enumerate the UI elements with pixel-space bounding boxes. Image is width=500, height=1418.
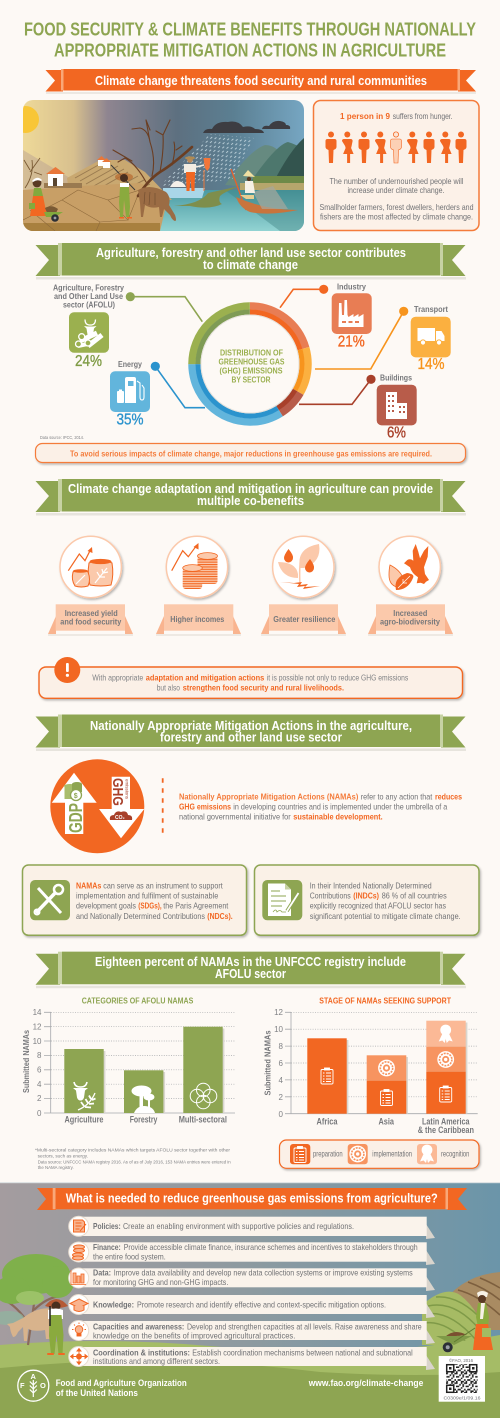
text: undernourished: The number of undernourished people will xyxy=(330,176,464,186)
footnote: sectors, such as energy. xyxy=(38,1154,88,1158)
icon: GDP up and GHG down: emissions xyxy=(124,779,130,800)
icon row: nine people xyxy=(326,132,466,163)
text: instrument: development goals xyxy=(76,900,136,910)
row: finance xyxy=(69,1242,435,1265)
row: data: Data: xyxy=(93,1268,111,1278)
text: INDCs: explicitly recognized that AFOLU sector has xyxy=(310,900,446,910)
sector: AFOLU 24% xyxy=(53,282,124,370)
connectors xyxy=(126,285,408,408)
farmer woman with wheelbarrow xyxy=(29,178,63,222)
row: finance: Finance: xyxy=(93,1242,121,1252)
text: instrument: the Paris Agreement xyxy=(163,900,229,910)
man in flood xyxy=(170,156,210,191)
bar chart: categories of AFOLU NAMAs xyxy=(21,995,235,1124)
sector: AFOLU 24%: 24% xyxy=(75,353,102,370)
row: policies: Create an enabling environment with supportive policies and regulations. xyxy=(123,1221,354,1231)
icon: cow head and wheat xyxy=(73,1082,96,1110)
FAO name: Food and Agriculture Organization xyxy=(56,1378,187,1388)
icon: buildings xyxy=(386,392,407,419)
ribbon heading: NAMAs: forestry and other land use sector xyxy=(160,730,342,744)
data source note: Data source: IPCC, 2014. xyxy=(40,435,84,440)
rain xyxy=(160,134,254,186)
text: INDCs: 86 % of all countries xyxy=(382,890,447,900)
bar chart: categories of AFOLU NAMAs: Agriculture xyxy=(64,1114,104,1124)
sector: AFOLU 24%: and Other Land Use xyxy=(54,291,123,301)
back hill xyxy=(67,160,172,200)
callout: major reductions required xyxy=(36,444,466,462)
bar chart: categories of AFOLU NAMAs: 2 xyxy=(37,1094,42,1103)
row: capacities and awareness: Capacities and awareness: xyxy=(93,1321,184,1331)
ribbon heading: co-benefits xyxy=(36,479,466,516)
bar chart: stage of NAMAs seeking support: Asia xyxy=(378,1116,395,1126)
sector: transport 14%: Transport xyxy=(414,304,448,314)
footer landscape xyxy=(0,1182,500,1418)
callout: adaptation and mitigation actions: it is possible not only to reduce GHG emissions xyxy=(267,673,408,683)
bar: Asia xyxy=(367,1055,408,1114)
row: capacities and awareness: Develop and strengthen capacities at all levels. Raise awareness and share xyxy=(187,1321,422,1331)
callout: major reductions required: To avoid serious impacts of climate change, major reductions in greenhouse gas emissions are required. xyxy=(70,449,432,459)
text: undernourished xyxy=(320,176,474,222)
bar chart: stage of NAMAs seeking support: STAGE OF NAMAs SEEKING SUPPORT xyxy=(319,995,452,1005)
QR code xyxy=(439,1356,485,1402)
icon: GDP up and GHG down xyxy=(50,759,144,853)
bar chart: stage of NAMAs seeking support: 10 xyxy=(274,1025,284,1034)
sector: transport 14% xyxy=(411,304,451,373)
sector: buildings 6%: Buildings xyxy=(380,372,412,382)
text: instrument: and Nationally Determined Contributions xyxy=(76,911,205,921)
ribbon heading: NAMAs: Nationally Appropriate Mitigation Actions in the agriculture, xyxy=(90,719,412,733)
bar chart: categories of AFOLU NAMAs: 10 xyxy=(33,1037,42,1046)
sector: energy 35%: Energy xyxy=(118,359,142,369)
text: INDCs: Contributions xyxy=(310,890,351,900)
small dead tree xyxy=(24,158,42,188)
legend item: implementation: implementation xyxy=(372,1148,412,1158)
text: instrument: implementation and fulfilment of sustainable xyxy=(76,890,219,900)
panel: NAMAs as instrument xyxy=(22,865,246,935)
row: coordination and institutions: institutions and among different sectors. xyxy=(93,1356,220,1366)
sector: energy 35%: 35% xyxy=(116,411,144,428)
text: NAMA definition xyxy=(179,791,462,821)
icon: interlocking circles xyxy=(190,1083,217,1109)
ribbon heading: eighteen percent: AFOLU sector xyxy=(215,967,286,981)
text: INDCs: (INDCs) xyxy=(353,890,379,900)
farmer with hoe xyxy=(111,165,135,218)
icon: GDP up and GHG down: CO₂ xyxy=(115,815,125,821)
text: undernourished: Smallholder farmers, forest dwellers, herders and xyxy=(320,202,474,212)
text: INDCs xyxy=(310,880,461,921)
donut centre label: GREENHOUSE GAS xyxy=(218,356,285,366)
row: data: for monitoring GHG and non-GHG impacts. xyxy=(93,1277,228,1287)
row: data xyxy=(69,1268,435,1291)
callout: adaptation and mitigation actions: With appropriate xyxy=(92,673,144,683)
sector: AFOLU 24%: sector (AFOLU) xyxy=(63,300,115,310)
legend item: implementation xyxy=(348,1144,412,1164)
row: knowledge: Knowledge: xyxy=(93,1299,134,1309)
icon: GDP up and GHG down: $ xyxy=(74,793,78,800)
row: capacities and awareness: knowledge on the benefits of improved agricultural practices. xyxy=(93,1331,295,1341)
icon: network arrows xyxy=(70,1348,88,1364)
icon: GDP up and GHG down: GDP xyxy=(66,803,86,833)
cow xyxy=(138,187,176,221)
bar: forestry xyxy=(124,1070,165,1113)
ribbon heading: climate change threatens food security: Climate change threatens food security and rural communities xyxy=(95,74,427,88)
benefit: increased yield xyxy=(48,536,133,636)
donut centre label: (GHG) EMISSIONS xyxy=(220,366,283,376)
bar chart: categories of AFOLU NAMAs: Multi-sectoral xyxy=(179,1114,227,1124)
bar chart: categories of AFOLU NAMAs: 8 xyxy=(37,1051,42,1060)
farmer with wheelbarrow xyxy=(436,1291,493,1352)
callout: adaptation and mitigation actions xyxy=(39,657,462,698)
icon: sun xyxy=(23,106,39,133)
ribbon heading: eighteen percent xyxy=(36,952,466,988)
FAO logo: F xyxy=(20,1381,25,1390)
label ribbon: Increased yield xyxy=(65,608,118,618)
footnote: *Multi-sectoral category includes NAMAs which targets AFOLU sector together with other xyxy=(35,1148,231,1152)
sector: AFOLU 24%: Agriculture, Forestry xyxy=(53,282,124,292)
fisher on boat xyxy=(231,169,298,214)
bar chart: stage of NAMAs seeking support: Africa xyxy=(316,1116,338,1126)
FAO logo: O xyxy=(40,1381,46,1390)
icon: graduation cap xyxy=(70,1299,88,1312)
text: NAMA definition: in developing countries and is implemented under the umbrella of a xyxy=(233,801,448,811)
callout: adaptation and mitigation actions: but also xyxy=(157,683,180,693)
dead tree xyxy=(113,120,192,196)
bar chart: stage of NAMAs seeking support: 0 xyxy=(279,1110,284,1119)
bar: Africa xyxy=(307,1038,348,1114)
sector: energy 35% xyxy=(110,359,150,428)
icon: sacks and rising arrow xyxy=(68,547,113,587)
QR code: C0309e/1/09.16 xyxy=(444,1396,481,1400)
label ribbon xyxy=(48,604,133,636)
row: finance: the entire food system. xyxy=(93,1251,166,1261)
icon: cow and logs xyxy=(76,320,102,347)
icon: signed document xyxy=(268,884,299,916)
clouds xyxy=(203,121,290,133)
legend xyxy=(280,1140,479,1168)
legend item: recognition: recognition xyxy=(441,1148,469,1158)
sector: buildings 6% xyxy=(377,372,417,442)
text: instrument: (NDCs). xyxy=(207,911,233,921)
ribbon heading: what is needed xyxy=(37,1188,467,1210)
sector: industry 21% xyxy=(332,282,372,350)
FAO name xyxy=(56,1378,187,1398)
callout: adaptation and mitigation actions: strengthen food security and rural livelihoods. xyxy=(183,683,344,693)
icon: truck xyxy=(418,328,444,345)
bar chart: stage of NAMAs seeking support: Latin America xyxy=(422,1116,470,1126)
row: knowledge: Promote research and identify effective and context-specific mitigation options. xyxy=(137,1299,386,1309)
bar chart: stage of NAMAs seeking support: 2 xyxy=(279,1093,284,1102)
bar chart: stage of NAMAs seeking support: 12 xyxy=(274,1008,284,1017)
icon: policy document xyxy=(74,1220,86,1232)
ground xyxy=(23,183,165,231)
legend item: recognition xyxy=(417,1144,469,1164)
icon: factory xyxy=(338,300,364,327)
text: instrument: NAMAs xyxy=(76,880,102,890)
text: INDCs: significant potential to mitigate climate change. xyxy=(310,911,461,921)
QR code: ©FAO, 2016 xyxy=(449,1358,474,1363)
bar chart: stage of NAMAs seeking support: 6 xyxy=(279,1059,284,1068)
illustration: drought and flood scene xyxy=(12,100,304,231)
ribbon heading: AFOLU contributes: Agriculture, forestry and other land use sector contributes xyxy=(96,246,406,260)
text: NAMA definition: sustainable development. xyxy=(293,811,383,821)
mountains xyxy=(225,138,304,191)
panel: hunger statistics xyxy=(314,100,479,230)
FAO name: of the United Nations xyxy=(56,1388,138,1398)
dashed divider xyxy=(162,778,164,835)
website: www.fao.org/climate-change xyxy=(308,1378,423,1389)
text: INDCs: In their Intended Nationally Determined xyxy=(310,880,432,890)
icon: fuel pump and battery xyxy=(117,377,144,403)
row: capacities and awareness xyxy=(69,1320,435,1344)
ribbon heading: climate change threatens food security xyxy=(46,69,476,94)
label ribbon: Higher incomes xyxy=(170,614,225,624)
bar chart: stage of NAMAs seeking support: 4 xyxy=(279,1076,284,1085)
icon: coins xyxy=(72,1245,84,1260)
bar chart: categories of AFOLU NAMAs: Forestry xyxy=(130,1114,157,1124)
bar chart: stage of NAMAs seeking support: Submitted NAMAs xyxy=(262,1030,272,1096)
sector: industry 21%: 21% xyxy=(338,333,365,350)
icon: plant and water drops xyxy=(278,544,320,589)
cow xyxy=(7,1308,53,1341)
icon: trees xyxy=(132,1086,155,1113)
footnote: Data source: UNFCCC NAMA registry 2016. As of as of July 2016, 153 NAMA entries were entered in xyxy=(38,1160,231,1164)
row: data: Improve data availability and develop new data collection systems or improve existing systems xyxy=(114,1268,413,1278)
row: coordination and institutions: Coordination & institutions: xyxy=(93,1347,190,1357)
ground xyxy=(0,1335,500,1418)
footnote xyxy=(35,1148,231,1170)
icon: light bulb xyxy=(72,1322,86,1336)
bar chart: categories of AFOLU NAMAs: Submitted NAMAs xyxy=(21,1030,31,1093)
text: instrument xyxy=(76,880,233,921)
text: one person in nine: 1 person in 9 xyxy=(340,111,390,121)
benefit: higher incomes xyxy=(156,536,241,636)
sector: buildings 6%: 6% xyxy=(387,425,406,442)
text: NAMA definition: GHG emissions xyxy=(179,801,231,811)
row: policies xyxy=(69,1216,435,1239)
farmer xyxy=(45,1299,68,1355)
text: one person in nine: suffers from hunger. xyxy=(393,111,453,121)
text: instrument: (SDGs), xyxy=(138,900,162,910)
bar chart: categories of AFOLU NAMAs: 12 xyxy=(33,1022,42,1032)
panel: INDCs xyxy=(254,865,479,935)
bar: agriculture xyxy=(64,1049,105,1113)
bar chart: categories of AFOLU NAMAs: 0 xyxy=(37,1109,42,1118)
bar chart: stage of NAMAs seeking support: 8 xyxy=(279,1042,284,1051)
row: coordination and institutions: Establish coordination mechanisms between national and subnational xyxy=(192,1347,413,1357)
water xyxy=(160,190,304,231)
bar chart: categories of AFOLU NAMAs: 4 xyxy=(37,1080,42,1089)
text: NAMA definition: refer to any action that xyxy=(361,791,433,801)
donut chart: GHG emissions by sector xyxy=(192,306,308,422)
label ribbon: Increased xyxy=(393,608,427,618)
footnote: the NAMA registry. xyxy=(38,1165,74,1170)
label ribbon: agro-biodiversity xyxy=(380,616,440,626)
tree xyxy=(0,1254,74,1345)
bar: Latin America and the Caribbean xyxy=(426,1021,467,1114)
label ribbon: and food security xyxy=(60,616,122,626)
benefit: agro-biodiversity xyxy=(368,536,453,636)
icon: bar graph xyxy=(71,1270,86,1284)
icon: exclamation xyxy=(54,657,80,683)
ribbon heading: eighteen percent: Eighteen percent of NAMAs in the UNFCCC registry include xyxy=(95,955,406,969)
ribbon heading: co-benefits: Climate change adaptation and mitigation in agriculture can provide xyxy=(68,482,433,496)
label ribbon: Greater resilience xyxy=(273,614,336,624)
FAO logo: A xyxy=(30,1372,36,1381)
bar chart: categories of AFOLU NAMAs: CATEGORIES OF AFOLU NAMAS xyxy=(82,995,194,1005)
ribbon heading: what is needed: What is needed to reduce greenhouse gas emissions from agriculture? xyxy=(66,1192,438,1206)
icon: tools xyxy=(34,885,63,914)
bar: multi-sectoral xyxy=(183,1027,224,1113)
legend item: preparation xyxy=(290,1144,343,1164)
FAO logo xyxy=(18,1370,49,1401)
icon: coin stacks and rising arrow xyxy=(172,543,218,589)
text: NAMA definition: Nationally Appropriate Mitigation Actions (NAMAs) xyxy=(179,791,358,801)
text: NAMA definition: national governmental initiative for xyxy=(179,811,291,821)
row: policies: Policies: xyxy=(93,1221,121,1231)
text: undernourished: fishers are the most affected by climate change. xyxy=(320,212,473,222)
bar chart: categories of AFOLU NAMAs: 14 xyxy=(33,1008,42,1017)
ribbon heading: co-benefits: multiple co-benefits xyxy=(197,494,304,508)
bar chart: stage of NAMAs seeking support xyxy=(262,995,478,1135)
hills right xyxy=(422,1272,500,1345)
sector: transport 14%: 14% xyxy=(418,356,445,373)
icon: bird and leaves xyxy=(389,544,429,590)
legend item: preparation: preparation xyxy=(313,1148,343,1158)
title xyxy=(24,20,476,60)
text: instrument: can serve as an instrument to support xyxy=(103,880,223,890)
benefit: greater resilience xyxy=(261,536,346,636)
bar chart: stage of NAMAs seeking support: & the Caribbean xyxy=(418,1125,474,1135)
row: coordination and institutions xyxy=(69,1346,435,1370)
sector: industry 21%: Industry xyxy=(337,282,366,292)
fence and huts xyxy=(44,183,82,188)
donut centre label: BY SECTOR xyxy=(232,374,270,384)
text: undernourished: increase under climate change. xyxy=(348,185,444,195)
callout: adaptation and mitigation actions: adaptation and mitigation actions xyxy=(146,673,265,683)
bar chart: categories of AFOLU NAMAs: 6 xyxy=(37,1066,42,1074)
donut centre label xyxy=(218,348,285,384)
ribbon heading: AFOLU contributes xyxy=(36,243,466,280)
label ribbon xyxy=(368,604,453,636)
donut centre label: DISTRIBUTION OF xyxy=(220,348,283,358)
ribbon heading: NAMAs xyxy=(36,714,466,751)
row: knowledge xyxy=(69,1294,435,1318)
icon: GDP up and GHG down: GHG xyxy=(109,778,126,806)
ribbon heading: AFOLU contributes: to climate change xyxy=(203,258,298,272)
text: NAMA definition: reduces xyxy=(435,791,462,801)
row: finance: Provide accessible climate finance, insurance schemes and incentives to stakeholders through xyxy=(124,1242,418,1252)
